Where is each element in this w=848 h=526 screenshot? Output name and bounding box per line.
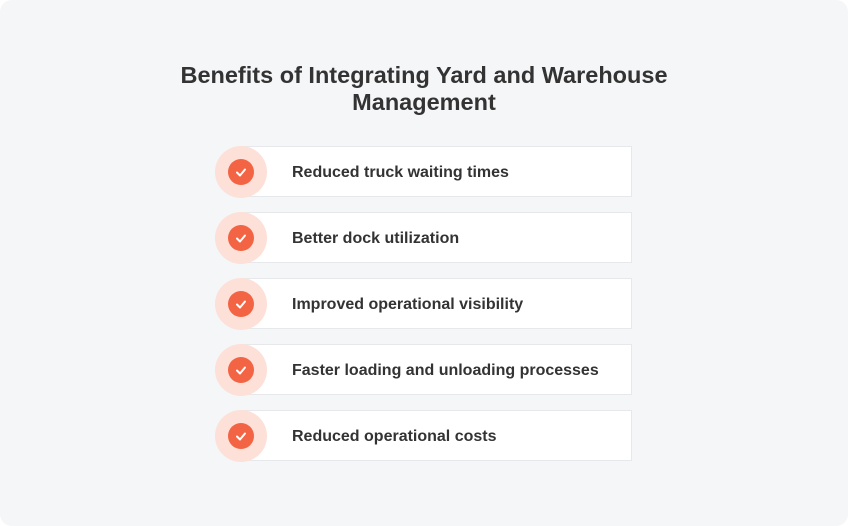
row 5 [215,410,632,462]
row 4: Faster loading and unloading processes [292,362,599,379]
row 3: Improved operational visibility [292,296,523,313]
row 5: Reduced operational costs [292,428,496,445]
title [180,62,668,115]
icon: check [228,225,254,251]
icon: check [228,291,254,317]
icon: check [228,357,254,383]
row 4 [215,344,632,396]
title: Benefits of Integrating Yard and Warehouse [180,62,668,88]
row 1 [215,146,632,198]
title: Management [352,89,496,115]
row 2 [215,212,632,264]
icon: check [228,159,254,185]
icon: check [228,423,254,449]
row 1: Reduced truck waiting times [292,164,509,181]
row 2: Better dock utilization [292,230,459,247]
row 3 [215,278,632,330]
